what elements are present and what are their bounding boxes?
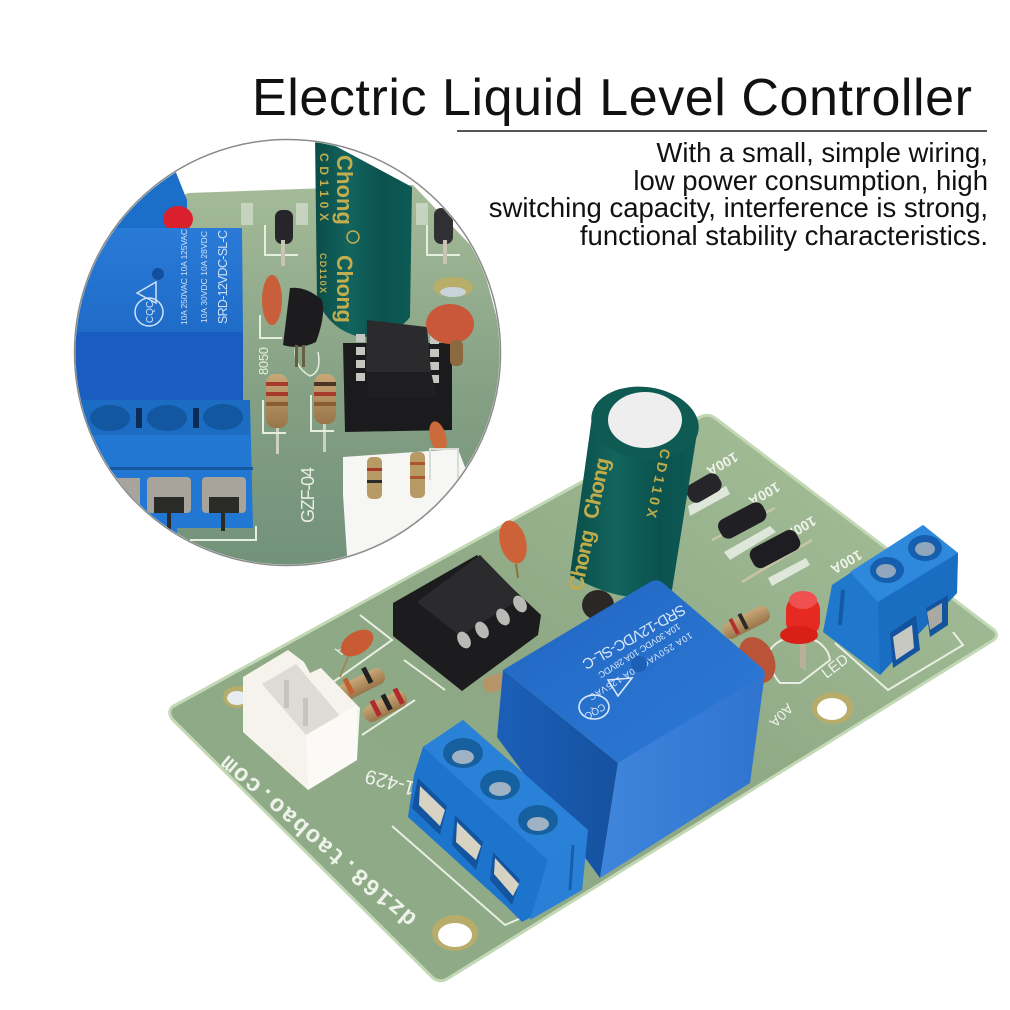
title: Electric Liquid Level Controller: [252, 69, 972, 127]
title underline: [457, 130, 987, 132]
orange capacitor near IC: [495, 517, 531, 578]
board silkscreen labels: 100A: [828, 547, 865, 578]
inset capacitor: [315, 135, 412, 337]
left terminal block: [408, 720, 588, 922]
board silkscreen labels: 1-429: [363, 765, 418, 799]
capacitor: CD110X: [643, 447, 674, 520]
inset capacitor: Chong: [332, 155, 357, 225]
silkscreen outlines: [322, 615, 963, 925]
inset capacitor: CD110X: [317, 153, 331, 221]
relay: CQC: [582, 700, 607, 721]
description text block: switching capacity, interference is strong,: [489, 192, 988, 223]
resistors near connector: [335, 666, 410, 724]
capacitor: Chong: [579, 456, 615, 521]
panel: main circuit board: [170, 380, 997, 981]
relay: SRD-12VDC-SL-C: [579, 601, 688, 673]
inset diodes: [265, 208, 460, 266]
inset resistors: [263, 374, 336, 454]
inset capacitor: Chong: [332, 255, 357, 323]
board silkscreen labels: dz168.taobao.com: [216, 749, 423, 931]
description text block: [489, 137, 988, 251]
board silkscreen labels: 100A: [782, 513, 819, 544]
resistor and capacitor near LED: [720, 604, 783, 689]
panel: circular zoomed inset of the board: [74, 138, 502, 566]
board silkscreen labels: 100A: [704, 449, 741, 480]
inset IC in socket: [343, 320, 452, 432]
inset transistor: [283, 288, 323, 376]
diodes: [683, 470, 812, 586]
capacitor: Chong: [564, 528, 600, 593]
inset board labels: GZF-04: [298, 467, 318, 523]
white connector: [243, 650, 360, 790]
relay: 10A 250VAC 10A 125VAC: [587, 630, 694, 703]
inset board labels: 8050: [256, 347, 271, 375]
small resistor near IC: [481, 671, 509, 695]
description text block: With a small, simple wiring,: [656, 137, 988, 168]
board silkscreen labels: 100A: [746, 479, 783, 510]
board silkscreen labels: A0A: [333, 634, 362, 660]
inset mounting hole: [433, 277, 473, 297]
transistor behind relay: [582, 590, 614, 620]
inset orange capacitors and resistor: [426, 304, 474, 455]
inset relay: CQC: [145, 301, 156, 323]
right terminal block: [823, 525, 958, 675]
inset relay: SRD-12VDC-SL-C: [216, 230, 230, 324]
inset relay: 10A 30VDC 10A 28VDC: [199, 231, 209, 323]
inset terminal block: [81, 400, 257, 541]
inset white connector: [343, 449, 470, 556]
relay: [497, 580, 765, 878]
mounting holes: [223, 686, 854, 951]
inset orange capacitor: [260, 275, 282, 338]
board silkscreen labels: LED: [818, 651, 852, 682]
inset board labels: [241, 203, 428, 523]
inset relay: [60, 228, 243, 404]
IC in socket: [393, 555, 541, 691]
capacitor: [564, 380, 703, 597]
orange capacitor near connector: [336, 624, 378, 677]
LED: [780, 591, 820, 670]
inset blue component and red LED: [113, 172, 193, 232]
relay: 10A 30VDC 10A 28VDC: [596, 621, 682, 680]
description text block: low power consumption, high: [633, 165, 988, 196]
inset relay: 10A 250VAC 10A 125VAC: [179, 229, 189, 325]
description text block: functional stability characteristics.: [580, 220, 988, 251]
inset circuit board: [76, 185, 500, 564]
inset capacitor: CD110X: [318, 253, 328, 293]
board silkscreen labels: A0A: [766, 701, 797, 731]
board silkscreen labels: [216, 449, 865, 931]
